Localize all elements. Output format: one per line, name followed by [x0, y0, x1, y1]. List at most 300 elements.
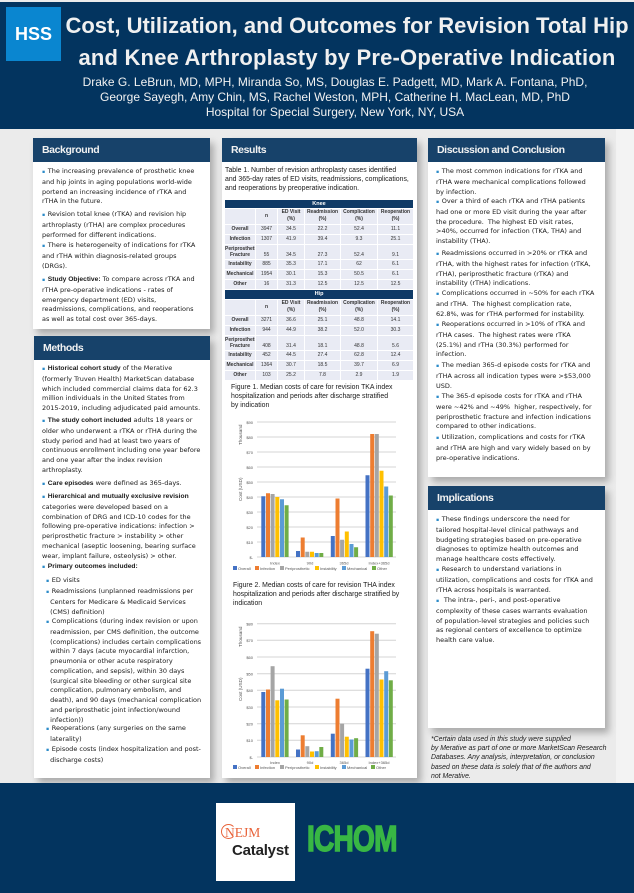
outcome list: and periprosthetic joint infection/wound: [50, 706, 180, 714]
discussion text: infection.: [436, 350, 466, 358]
table: knee and hip: 5.6: [392, 343, 399, 349]
discussion text: ▪ Over a third of each rTKA and rTHA patients: [436, 197, 585, 205]
table: knee and hip: Infection: [230, 327, 250, 333]
background heading: [33, 138, 210, 162]
figure 1 chart: $90: [246, 420, 254, 425]
outcome list: discharge costs): [50, 756, 103, 764]
discussion text: [436, 167, 586, 196]
figure 2 chart: Overall: [238, 765, 251, 770]
table: knee and hip: 55: [264, 252, 269, 258]
table: knee and hip: 452: [262, 352, 271, 358]
table: knee and hip: 6.1: [392, 261, 399, 267]
primary outcomes: ▪ Primary outcomes included:: [42, 563, 138, 570]
results heading: Results: [231, 144, 266, 156]
footnote: [431, 736, 606, 780]
table: knee and hip: Mechanical: [227, 271, 253, 277]
outcome list: [46, 745, 201, 764]
table: knee and hip: 944: [262, 327, 271, 333]
title: Cost, Utilization, and Outcomes for Revision Total Hip: [65, 13, 629, 38]
outcome list: [46, 724, 186, 743]
table: knee and hip: 48.8: [354, 343, 364, 349]
figure 2 chart: Index+365d: [368, 760, 390, 765]
footnote: based on these data is solely that of the authors and: [431, 764, 591, 771]
table: knee and hip: Fracture: [230, 342, 250, 348]
discussion text: instability (THA).: [436, 237, 490, 245]
implications text: [436, 596, 589, 644]
figure 1 chart: Infection: [260, 566, 275, 571]
table: knee and hip: 6.9: [392, 362, 399, 368]
table: knee and hip: 2.9: [356, 372, 362, 378]
outcome list: (complications) includes certain complications: [50, 638, 201, 646]
table: knee and hip: 18.5: [318, 362, 327, 368]
discussion text: (25.1%) and rTHa (30.3%) performed for: [436, 340, 569, 348]
implications text: [436, 565, 593, 594]
table: knee and hip: 885: [262, 261, 271, 267]
outcome list: (CMS) definition): [50, 608, 105, 616]
methods text: continuous enrollment including one year before: [42, 446, 200, 454]
background heading: Background: [42, 144, 99, 156]
table: knee and hip: 9.3: [356, 236, 362, 242]
figure 2 chart: $70: [246, 638, 254, 643]
table: knee and hip: 30.7: [286, 362, 296, 368]
outcome list: within 7 days (acute myocardial infarction,: [50, 647, 189, 655]
table: knee and hip: 41.9: [286, 236, 296, 242]
discussion text: rTHA across all indication types were >$53,000: [436, 372, 591, 380]
table: knee and hip: ED Visit: [282, 209, 300, 215]
table: knee and hip: 14.1: [391, 317, 400, 323]
table: knee and hip: 48.8: [354, 317, 364, 323]
table: knee and hip: 25.1: [318, 317, 327, 323]
discussion text: ▪ Complications occurred in ~50% for each rTKA: [436, 289, 594, 297]
outcome list: [46, 587, 194, 616]
figure 1 chart: Overall: [238, 566, 251, 571]
figure 2 chart: $10: [246, 738, 254, 743]
table: knee and hip: (%): [319, 307, 326, 313]
table: knee and hip: 9.1: [392, 252, 399, 258]
panel: implications: [428, 486, 605, 728]
HSS logo: [6, 7, 61, 61]
figure 2 chart: $80: [246, 622, 254, 626]
discussion text: and rTHA are high and vary widely based on by: [436, 444, 591, 452]
outcome list: ▪ Readmissions (unplanned readmissions per: [46, 587, 193, 595]
outcome list: readmission, per CMS definition, the outcome: [50, 628, 199, 636]
table: knee and hip: 44.9: [286, 327, 296, 333]
figure 2 chart: $-: [249, 755, 254, 760]
NEJM wordmark: NEJM: [225, 825, 260, 840]
implications text: as regional centers of excellence to optimize: [436, 626, 582, 634]
implications text: health care value.: [436, 636, 495, 644]
table: knee and hip: Knee: [312, 200, 326, 206]
table: knee and hip: Instability: [228, 261, 252, 267]
figure 2 chart: $40: [246, 688, 254, 693]
table: knee and hip: n: [265, 212, 268, 218]
table: knee and hip: n: [265, 304, 268, 310]
figure 2 chart: Mechanical: [347, 765, 367, 770]
implications text: diagnoses to optimize health outcomes and: [436, 545, 578, 553]
outcome list: (surgical site bleeding or other surgical site: [50, 676, 191, 684]
authors and affiliation: Drake G. LeBrun, MD, MPH, Miranda So, MS, Douglas E. Padgett, MD, Mark A. Fontana, PhD,: [83, 75, 587, 89]
figure 1 chart: 90d: [307, 560, 313, 566]
table: knee and hip: Instability: [228, 352, 252, 358]
discussion text: [436, 392, 592, 430]
table: knee and hip: Complication: [343, 209, 375, 215]
implications heading: [428, 486, 605, 510]
table: knee and hip: 27.3: [318, 252, 327, 258]
methods text: 2015-2019, including adjudicated paid amounts.: [42, 404, 200, 412]
table: knee and hip: 1.9: [392, 372, 399, 378]
methods text: ▪ Hierarchical and mutually exclusive revision: [42, 493, 189, 500]
table: knee and hip: 31.3: [286, 281, 296, 287]
implications text: complexity of these cases warrants evaluation: [436, 607, 587, 615]
figure 1 chart: $-: [249, 555, 254, 560]
study objective: emergency department (ED) visits,: [42, 296, 156, 304]
study objective: readmissions, complications, and reoperations: [42, 305, 194, 313]
table 1 caption: and 365-day rates of ED visits, readmissions, complications,: [225, 176, 409, 183]
figure 1 chart: Cost (USD): [238, 477, 243, 501]
methods text: study period and had at least two years of: [42, 436, 180, 444]
figure 1 chart: $80: [246, 435, 254, 440]
table: knee and hip: 3271: [261, 317, 272, 323]
figure 1 chart: 365d: [340, 560, 348, 566]
table: knee and hip: 35.3: [286, 261, 296, 267]
footnote: by Merative as part of one or more MarketScan Research: [431, 745, 606, 752]
table: knee and hip: 39.4: [318, 236, 327, 242]
implications text: rTHA across hospitals is warranted.: [436, 586, 551, 594]
table 1 caption: [225, 166, 409, 192]
implications text: ▪ These findings underscore the need for: [436, 515, 570, 523]
discussion text: by infection.: [436, 188, 476, 196]
background text: ▪ The increasing prevalence of prosthetic knee: [42, 167, 194, 175]
discussion text: were ~42% and ~49% higher, respectively, for: [436, 403, 592, 411]
methods text: ▪ Care episodes were defined as 365-days.: [42, 479, 182, 487]
discussion text: [436, 320, 585, 358]
figure 2 chart: $60: [246, 655, 254, 660]
implications text: budgeting strategies based on pre-operative: [436, 536, 582, 544]
table: knee and hip: (%): [355, 307, 363, 313]
discussion text: ▪ Utilization, complications and costs for rTKA: [436, 433, 585, 441]
discussion text: [436, 249, 591, 287]
table: knee and hip: 34.5: [286, 252, 296, 258]
figure 1 chart: Index+365d: [368, 560, 390, 566]
outcome list: complication, and sepsis), within 30 days: [50, 667, 184, 675]
table: knee and hip: (%): [355, 216, 363, 222]
table: knee and hip: 52.4: [354, 252, 364, 258]
methods text: [42, 364, 200, 412]
methods text: combination of DRG and ICD-10 codes for the: [42, 512, 191, 520]
table: knee and hip: 27.4: [318, 352, 327, 358]
background text: rTHA in the future.: [42, 197, 102, 205]
methods text: arthroplasty.: [42, 466, 83, 474]
methods text: periprosthetic fracture > instability > other: [42, 532, 183, 540]
figure 2 chart: Instability: [320, 765, 337, 770]
discussion text: had one or more ED visit during the year after: [436, 208, 586, 216]
footnote: *Certain data used in this study were supplied: [431, 736, 571, 743]
figure 1 chart: [233, 420, 396, 571]
HSS logo: HSS: [15, 24, 52, 44]
outcome list: ▪ Episode costs (index hospitalization and post-: [46, 745, 201, 753]
methods heading: Methods: [43, 342, 83, 354]
background text: and hip joints in aging populations world-wide: [42, 178, 192, 186]
table 1 caption: and reoperations by preoperative indication.: [225, 185, 359, 192]
figure 1 chart: $20: [246, 525, 254, 530]
background text: arthroplasty (rTHA) are complex procedures: [42, 221, 185, 229]
implications text: ▪ Research to understand variations in: [436, 565, 562, 573]
discussion text: instability (rTHA) indications.: [436, 279, 530, 287]
study objective: ▪ Study Objective: To compare across rTKA and: [42, 275, 195, 283]
panel: background: [33, 138, 210, 329]
discussion text: ▪ The median 365-d episode costs for rTKA and: [436, 361, 590, 369]
panel: methods: [34, 336, 210, 778]
table: knee and hip: 1307: [261, 236, 272, 242]
discussion text: ▪ The 365-d episode costs for rTKA and rTHA: [436, 392, 582, 400]
implications text: ▪ The intra-, peri-, and post-operative: [436, 596, 560, 604]
study objective: [42, 275, 195, 323]
table: knee and hip: 12.5: [318, 281, 327, 287]
table: knee and hip: Reoperation: [381, 209, 410, 215]
outcome list: complication, pulmonary embolism, and: [50, 686, 181, 694]
figure 2 chart: Cost (USD): [238, 677, 243, 701]
background text: and rTHA within diagnosis-related groups: [42, 252, 177, 260]
table: knee and hip: 11.1: [391, 226, 400, 232]
title: [65, 13, 629, 70]
table: knee and hip: 52.4: [354, 226, 364, 232]
table: knee and hip: 62.8: [354, 352, 364, 358]
methods heading: [34, 336, 210, 360]
table 1 caption: Table 1. Number of revision arthroplasty cases identified: [225, 167, 396, 174]
implications heading: Implications: [437, 492, 493, 504]
Catalyst wordmark: Catalyst: [232, 842, 289, 859]
table: knee and hip: 18.1: [318, 343, 327, 349]
figure 2 chart: Thousand: [238, 626, 243, 647]
figure 1 chart: $40: [246, 495, 254, 500]
table: knee and hip: 34.5: [286, 226, 296, 232]
table: knee and hip: 3947: [261, 226, 272, 232]
methods text: ▪ The study cohort included adults 18 years or: [42, 416, 192, 424]
implications text: tailored hospital-level clinical pathways and: [436, 526, 579, 534]
figure 1 caption: by indication: [231, 402, 269, 409]
figure 2 chart: Index: [270, 760, 280, 765]
footnote: Databases. Any analysis, interpretation, or conclusion: [431, 754, 595, 761]
methods text: [42, 416, 200, 474]
outcome list: pneumonia or other acute respiratory: [50, 657, 173, 665]
figure 2 chart: $30: [246, 705, 254, 710]
background text: portend an increasing incidence of rTKA and: [42, 188, 186, 196]
outcome list: ▪ ED visits: [46, 576, 80, 584]
methods text: following pre-operative indications: infection >: [42, 522, 195, 530]
authors and affiliation: Hospital for Special Surgery, New York, NY, USA: [206, 105, 464, 119]
outcome list: infection)): [50, 716, 83, 724]
figure 2 chart: Periprosthetic: [285, 765, 309, 770]
table: knee and hip: 6.1: [392, 271, 399, 277]
methods text: categories were developed based on a: [42, 503, 168, 511]
figure 1 chart: $30: [246, 510, 254, 515]
discussion text: ▪ Reoperations occurred in >10% of rTKA and: [436, 320, 585, 328]
methods text: [42, 493, 196, 560]
methods text: (formerly Truven Health) MarketScan database: [42, 375, 194, 383]
table: knee and hip: 62: [356, 261, 362, 267]
discussion text: [436, 361, 591, 390]
table: knee and hip: 39.7: [354, 362, 364, 368]
discussion text: and rTHA. The highest complication rate,: [436, 300, 572, 308]
methods text: and one year after the index revision: [42, 456, 163, 464]
study objective: rTHA pre-operative indications - rates of: [42, 286, 173, 294]
table: knee and hip: 30.1: [286, 271, 296, 277]
figure 1 chart: Thousand: [238, 424, 243, 445]
table: knee and hip: Overall: [232, 317, 248, 323]
authors and affiliation: [83, 75, 587, 119]
outcome list: ▪ Reoperations (any surgeries on the same: [46, 724, 186, 732]
figure 1 chart: Mechanical: [347, 566, 367, 571]
table: knee and hip: 25.1: [391, 236, 400, 242]
table: knee and hip: 1954: [261, 271, 272, 277]
background text: [42, 210, 186, 238]
outcome list: laterality): [50, 735, 82, 743]
figure 1 chart: $10: [246, 540, 254, 545]
table: knee and hip: 15.3: [318, 271, 327, 277]
table: knee and hip: Fracture: [230, 252, 250, 258]
table: knee and hip: 25.2: [286, 372, 296, 378]
background text: (DRGs).: [42, 262, 67, 270]
methods text: wear, implant failure, osteolysis) > other.: [42, 552, 177, 560]
discussion text: 62.8%, was for rTHA performed for instability.: [436, 310, 585, 318]
header band: [0, 2, 634, 129]
figure 2 chart: [233, 622, 396, 770]
figure 2 chart: 365d: [340, 760, 348, 765]
table: knee and hip: ED Visit: [282, 300, 300, 306]
study objective: as well as total cost over 365-days.: [42, 315, 157, 323]
figure 1 chart: Instability: [320, 566, 337, 571]
table: knee and hip: Infection: [230, 236, 250, 242]
discussion text: periprosthetic fracture and infection indications: [436, 412, 591, 420]
figure 1 chart: Other: [377, 566, 388, 571]
discussion text: rTHA), periprosthetic fracture (rTKA) and: [436, 270, 568, 278]
background text: ▪ There is heterogeneity of indications for rTKA: [42, 241, 195, 249]
figure 1 caption: [231, 384, 392, 409]
table: knee and hip: 12.5: [354, 281, 364, 287]
background text: performed for different indications.: [42, 230, 156, 238]
table: knee and hip: Overall: [232, 226, 248, 232]
figure 2 chart: Infection: [260, 765, 275, 770]
NEJM Catalyst logo: [216, 803, 295, 881]
figure 2 chart: $20: [246, 722, 254, 726]
discussion text: rTHA were mechanical complications followed: [436, 178, 586, 186]
table: knee and hip: 7.8: [319, 372, 326, 378]
discussion text: rTHA, with the highest rates for infection (rTKA,: [436, 260, 591, 268]
table: knee and hip: 1364: [261, 362, 272, 368]
title: and Knee Arthroplasty by Pre-Operative Indication: [78, 44, 616, 70]
table: knee and hip: 36.6: [286, 317, 296, 323]
table: knee and hip: 16: [264, 281, 269, 287]
methods text: older who underwent a rTKA or rTHA during the: [42, 427, 197, 435]
background text: [42, 241, 196, 270]
table: knee and hip: (%): [287, 216, 295, 222]
discussion text: USD.: [436, 382, 452, 390]
outcome list: [46, 617, 201, 724]
table: knee and hip: 17.1: [318, 261, 327, 267]
figure 1 chart: Periprosthetic: [285, 566, 309, 571]
discussion text: pre-operative indications.: [436, 454, 519, 462]
figure 1 caption: hospitalization and periods after discharge stratified: [231, 393, 388, 400]
figure 2 chart: $50: [246, 672, 254, 676]
discussion text: [436, 289, 594, 318]
discussion text: the procedure. The highest ED visit rates,: [436, 218, 574, 226]
table: knee and hip: Readmission: [307, 300, 338, 306]
implications text: of population-level strategies and policies such: [436, 616, 589, 624]
methods text: which included commercial claims data for 62.3: [42, 384, 198, 392]
table: knee and hip: [225, 200, 413, 380]
table: knee and hip: Mechanical: [227, 362, 253, 368]
discussion text: [436, 433, 591, 462]
figure 2 caption: Figure 2. Median costs of care for revision THA index: [233, 582, 395, 589]
table: knee and hip: (%): [392, 216, 399, 222]
footer band: [0, 783, 634, 893]
discussion heading: [428, 138, 605, 162]
figure 2 caption: [233, 582, 400, 607]
table: knee and hip: Readmission: [307, 209, 338, 215]
authors and affiliation: George Sayegh, Amy Chin, MS, Rachel Weston, MPH, Catherine H. MacLean, MD, PhD: [100, 90, 570, 104]
table: knee and hip: Complication: [343, 300, 375, 306]
discussion text: >40%, occurred for infection (TKA, THA) and: [436, 227, 581, 235]
figure 2 chart: 90d: [307, 760, 313, 765]
table: knee and hip: Other: [233, 372, 247, 378]
table: knee and hip: Hip: [315, 291, 323, 297]
outcome list: ▪ Complications (during index revision or upon: [46, 617, 198, 625]
table: knee and hip: 44.5: [286, 352, 296, 358]
figure 1 chart: $60: [246, 465, 254, 470]
table: knee and hip: 22.2: [318, 226, 327, 232]
outcome list: Centers for Medicare & Medicaid Services: [50, 598, 186, 606]
table: knee and hip: 12.5: [391, 281, 400, 287]
background text: ▪ Revision total knee (rTKA) and revision hip: [42, 210, 186, 218]
table: knee and hip: 50.5: [354, 271, 364, 277]
figure 2 caption: hospitalization and periods after discharge stratified by: [233, 591, 399, 598]
outcome list: death), and 90 days (mechanical complication: [50, 696, 201, 704]
figure 2 caption: indication: [233, 600, 262, 607]
NEJM ring mark: [221, 824, 236, 839]
figure 1 chart: $70: [246, 450, 254, 455]
background text: [42, 167, 194, 205]
ICHOM logo: ICHOM: [307, 818, 397, 859]
table: knee and hip: (%): [392, 307, 399, 313]
panel: discussion and conclusion: [428, 138, 605, 477]
table: knee and hip: Reoperation: [381, 300, 410, 306]
footnote: not Merative.: [431, 773, 471, 780]
table: knee and hip: 103: [262, 372, 271, 378]
implications text: [436, 515, 582, 563]
implications text: manage healthcare costs effectively.: [436, 555, 555, 563]
figure 2 chart: Other: [376, 765, 387, 770]
table: knee and hip: (%): [287, 307, 295, 313]
table: knee and hip: 38.2: [318, 327, 327, 333]
discussion text: compared to other indications.: [436, 422, 536, 430]
figure 1 chart: Index: [270, 560, 280, 566]
methods text: million individuals in the United States from: [42, 394, 185, 402]
figure 1 caption: Figure 1. Median costs of care for revision TKA index: [231, 384, 392, 391]
table: knee and hip: Other: [233, 281, 247, 287]
implications text: utilization, complications and costs for rTKA and: [436, 576, 593, 584]
discussion text: ▪ The most common indications for rTKA and: [436, 167, 582, 175]
results heading: [222, 138, 417, 162]
table: knee and hip: (%): [319, 216, 326, 222]
discussion text: rTHA cases. The highest rates were rTKA: [436, 331, 571, 339]
table: knee and hip: 12.4: [391, 352, 400, 358]
table: knee and hip: 30.3: [391, 327, 400, 333]
table: knee and hip: 408: [262, 343, 271, 349]
panel: results: [222, 138, 417, 778]
discussion heading: Discussion and Conclusion: [437, 144, 565, 156]
figure 1 chart: $50: [246, 480, 254, 485]
discussion text: [436, 197, 586, 245]
